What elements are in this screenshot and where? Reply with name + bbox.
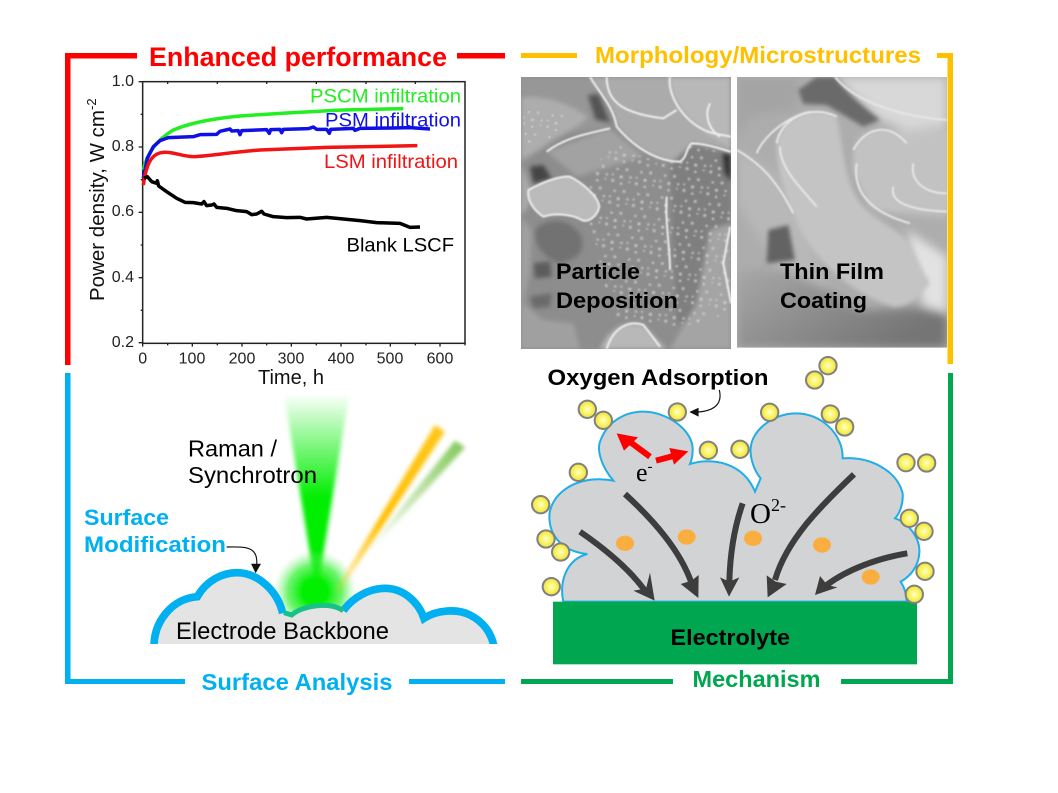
diagram: oxygen reduction mechanism bbox=[532, 357, 935, 664]
electron transfer arrows bbox=[628, 441, 673, 461]
SEM image: thin film coating bbox=[737, 77, 947, 348]
label: Raman / Synchrotron: Raman / bbox=[188, 436, 277, 462]
heading: Enhanced performance: Enhanced performance bbox=[149, 42, 447, 72]
label: Surface Modification: Modification bbox=[84, 532, 226, 557]
electrode backbone with surface layer bbox=[154, 573, 494, 647]
panel frame: surface analysis (blue bracket) bbox=[65, 373, 505, 684]
label: Particle Deposition: Deposition bbox=[556, 288, 678, 313]
panel frame: enhanced performance (red bracket) bbox=[65, 53, 505, 365]
x axis title: Time, h bbox=[258, 366, 324, 389]
x axis tick labels bbox=[138, 350, 453, 368]
electrode particle cloud bbox=[549, 412, 919, 602]
electrolyte block bbox=[553, 602, 917, 664]
chart axes frame and ticks bbox=[139, 82, 465, 347]
y axis tick labels bbox=[112, 73, 134, 351]
label: Electrolyte: Electrolyte bbox=[670, 625, 790, 650]
label: Electrode Backbone: Electrode Backbone bbox=[176, 618, 389, 645]
label: Raman / Synchrotron: Synchrotron bbox=[188, 462, 317, 488]
label: oxide ion: 2- bbox=[771, 495, 786, 515]
x axis tick labels: 500 bbox=[377, 350, 403, 368]
x axis tick labels: 200 bbox=[229, 350, 255, 368]
label: Thin Film Coating: Coating bbox=[780, 288, 867, 313]
label: oxide ion: O bbox=[750, 498, 771, 530]
curve label: PSCM infiltration: PSCM infiltration bbox=[310, 86, 461, 108]
curve label: LSM infiltration: LSM infiltration bbox=[324, 151, 458, 173]
callout arrow: oxygen adsorption bbox=[691, 390, 720, 416]
y axis tick labels: 0.2 bbox=[112, 334, 134, 351]
green beam incident bbox=[284, 393, 349, 583]
panel frame: mechanism (green bracket) bbox=[521, 373, 953, 684]
curve label: Blank LSCF: Blank LSCF bbox=[346, 236, 454, 256]
curve: Blank LSCF bbox=[144, 177, 420, 227]
green scattered beam bbox=[370, 441, 465, 548]
label: Surface Modification: Surface bbox=[84, 505, 169, 530]
x axis tick labels: 300 bbox=[278, 350, 304, 368]
heading: Morphology/Microstructures: Morphology/Microstructures bbox=[595, 42, 921, 68]
y axis tick labels: 1.0 bbox=[112, 73, 134, 90]
y axis title: -2 bbox=[84, 98, 99, 110]
curve: PSM infiltration bbox=[143, 127, 430, 178]
label: Raman / Synchrotron bbox=[188, 436, 317, 488]
dark crevice bbox=[798, 77, 880, 127]
y axis tick labels: 0.8 bbox=[112, 138, 134, 155]
label: Oxygen Adsorption: Oxygen Adsorption bbox=[548, 365, 768, 390]
x axis tick labels: 0 bbox=[138, 350, 147, 368]
x axis tick labels: 100 bbox=[179, 350, 205, 368]
curve label: PSM infiltration: PSM infiltration bbox=[325, 110, 461, 132]
label: Surface Modification bbox=[84, 505, 226, 557]
oxide ion flow arrows bbox=[580, 474, 907, 591]
curve: PSCM infiltration bbox=[143, 109, 403, 170]
grain highlight bbox=[528, 176, 599, 221]
x axis tick labels: 400 bbox=[328, 350, 354, 368]
label: electron: - bbox=[648, 459, 653, 475]
line chart: power density over time bbox=[84, 73, 465, 389]
label: electron: e bbox=[636, 458, 648, 487]
x axis tick labels: 600 bbox=[427, 350, 453, 368]
curve: LSM infiltration bbox=[143, 146, 417, 185]
label: Thin Film Coating bbox=[780, 259, 884, 313]
diagram: surface analysis electrode bbox=[154, 393, 494, 647]
green glow at surface bbox=[273, 550, 357, 633]
SEM image: particle deposition bbox=[521, 77, 731, 349]
label: Particle Deposition bbox=[556, 259, 678, 313]
label: Thin Film Coating: Thin Film bbox=[780, 259, 884, 284]
heading: Surface Analysis: Surface Analysis bbox=[202, 669, 392, 695]
label: Particle Deposition: Particle bbox=[556, 259, 640, 284]
y axis title: Power density, W cm bbox=[86, 110, 109, 301]
oxygen molecules bbox=[532, 357, 935, 603]
y axis tick labels: 0.4 bbox=[112, 269, 134, 286]
y axis tick labels: 0.6 bbox=[112, 203, 134, 220]
callout arrow: surface modification bbox=[227, 547, 260, 572]
data curves bbox=[143, 109, 430, 227]
orange scattered beam bbox=[335, 425, 445, 593]
heading: Mechanism: Mechanism bbox=[692, 666, 820, 692]
orange particles bbox=[616, 529, 880, 585]
panel frame: morphology (yellow bracket) bbox=[521, 53, 953, 364]
